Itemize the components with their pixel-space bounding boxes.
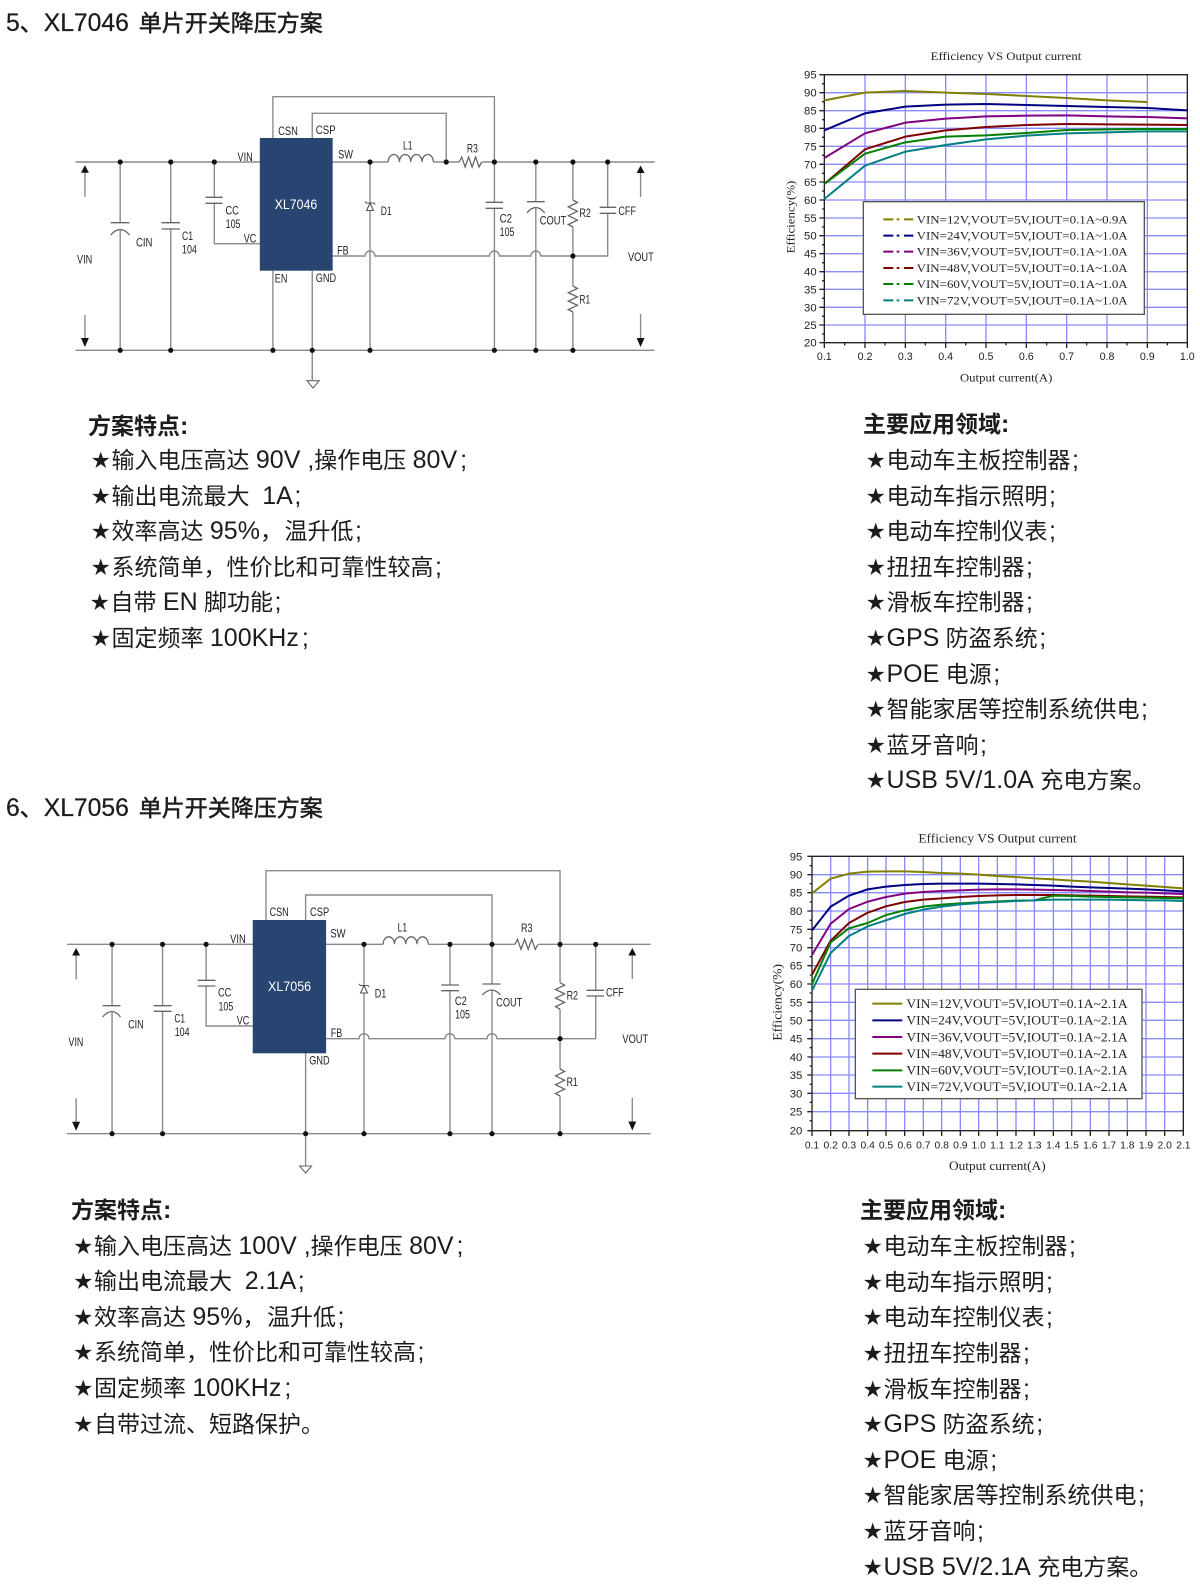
- y tick labels: 60: [790, 979, 802, 991]
- component labels: C1: [174, 1011, 185, 1026]
- component labels: VOUT: [628, 250, 654, 264]
- feature list: 效率高达 95%，温升低;: [94, 1303, 344, 1331]
- application list: ★: [866, 592, 885, 613]
- legend: VIN=48V,VOUT=5V,IOUT=0.1A~2.1A: [906, 1047, 1129, 1061]
- junction dots: [118, 159, 610, 353]
- application list: ★: [864, 1379, 882, 1400]
- application list: ★: [866, 699, 885, 720]
- text block: XL7056 features: [71, 1196, 464, 1436]
- component labels: [69, 905, 649, 1089]
- y tick labels: 50: [790, 1015, 802, 1027]
- y tick labels: 45: [790, 1034, 802, 1046]
- x tick labels: 0.2: [823, 1141, 838, 1152]
- component labels: FB: [337, 243, 349, 258]
- grid: [812, 856, 1183, 1131]
- text block: XL7046 features: [88, 412, 467, 652]
- component labels: VIN: [69, 1035, 83, 1049]
- axes and ticks: [819, 75, 1187, 348]
- component labels: L1: [398, 920, 407, 935]
- heading: applications: 主要应用领域:: [863, 410, 1009, 438]
- application list: 扭扭车控制器;: [886, 553, 1033, 581]
- application list: POE 电源;: [884, 1446, 997, 1474]
- x tick labels: [805, 1141, 1191, 1152]
- component labels: R2: [567, 988, 578, 1003]
- x tick labels: 0.2: [858, 351, 872, 363]
- x tick labels: 1.1: [990, 1141, 1005, 1152]
- component labels: VIN: [77, 252, 92, 267]
- application list: GPS 防盗系统;: [884, 1410, 1043, 1438]
- application list: ★: [866, 628, 885, 649]
- feature list: ★: [74, 1271, 93, 1292]
- component labels: VIN: [238, 150, 253, 164]
- application list: ★: [864, 1343, 882, 1364]
- feature list: ★: [74, 1378, 93, 1399]
- application list: USB 5V/2.1A 充电方案。: [884, 1553, 1152, 1581]
- junction dots: [109, 942, 598, 1136]
- feature list: ★: [74, 1307, 93, 1328]
- line chart: XL7046 efficiency vs output current: [783, 49, 1195, 384]
- x axis title: Output current(A): [949, 1159, 1046, 1173]
- y tick labels: 70: [790, 943, 802, 955]
- y tick labels: [790, 851, 802, 1137]
- feature list: 输入电压高达 100V ,操作电压 80V;: [94, 1232, 464, 1260]
- component labels: D1: [375, 986, 386, 1001]
- legend: VIN=24V,VOUT=5V,IOUT=0.1A~1.0A: [917, 229, 1128, 243]
- x tick labels: 0.7: [1059, 351, 1074, 363]
- wires: [67, 871, 651, 1166]
- x tick labels: [817, 351, 1195, 363]
- x tick labels: 0.5: [879, 1141, 893, 1152]
- x tick labels: 1.0: [1180, 351, 1195, 363]
- legend: VIN=72V,VOUT=5V,IOUT=0.1A~1.0A: [917, 293, 1128, 307]
- diode D1: [365, 202, 375, 210]
- application list: 扭扭车控制器;: [884, 1339, 1030, 1367]
- x tick labels: 0.1: [805, 1141, 819, 1152]
- chart title: Efficiency VS Output current: [931, 49, 1082, 63]
- y tick labels: 95: [790, 851, 802, 863]
- component labels: CSN: [270, 905, 289, 919]
- voltage arrows: [76, 955, 632, 1122]
- component labels: CIN: [136, 235, 152, 250]
- component labels: R2: [579, 206, 591, 220]
- x tick labels: 0.4: [938, 351, 953, 363]
- y tick labels: 30: [804, 302, 817, 314]
- feature list: [74, 1232, 464, 1436]
- application list: ★: [866, 557, 885, 578]
- application list: [864, 1232, 1152, 1581]
- feature list: [90, 446, 467, 652]
- capacitors: [103, 980, 604, 1017]
- y tick labels: 35: [790, 1070, 802, 1082]
- application list: ★: [864, 1414, 882, 1435]
- application list: 电动车控制仪表;: [884, 1303, 1053, 1331]
- x tick labels: 1.0: [971, 1141, 986, 1152]
- feature list: 固定频率 100KHz;: [112, 624, 309, 652]
- component labels: C1: [182, 229, 193, 243]
- component labels: CC: [225, 203, 239, 218]
- x tick labels: 1.8: [1120, 1141, 1135, 1152]
- application list: 滑板车控制器;: [884, 1375, 1030, 1403]
- application list: 智能家居等控制系统供电;: [884, 1481, 1145, 1509]
- application list: 蓝牙音响;: [884, 1517, 984, 1545]
- x tick labels: 0.3: [842, 1141, 856, 1152]
- x tick labels: 2.0: [1157, 1141, 1172, 1152]
- component labels: CFF: [606, 985, 624, 1000]
- legend: VIN=12V,VOUT=5V,IOUT=0.1A~2.1A: [906, 997, 1129, 1011]
- component labels: R1: [579, 292, 590, 307]
- component labels: SW: [338, 147, 354, 162]
- y tick labels: 90: [804, 88, 817, 100]
- component labels: GND: [309, 1053, 330, 1068]
- y tick labels: 85: [790, 888, 802, 900]
- x tick labels: 1.7: [1102, 1141, 1116, 1152]
- feature list: 输出电流最大 2.1A;: [94, 1267, 305, 1295]
- component labels: C2: [500, 211, 512, 226]
- text block: XL7056 applications: [860, 1196, 1152, 1581]
- component labels: COUT: [540, 213, 567, 228]
- feature list: 自带过流、短路保护。: [94, 1410, 324, 1436]
- y tick labels: 70: [804, 159, 817, 171]
- heading: features: 方案特点:: [88, 412, 188, 440]
- application list: ★: [864, 1485, 882, 1506]
- application list: 电动车指示照明;: [884, 1268, 1053, 1296]
- component labels: EN: [275, 271, 287, 286]
- x tick labels: 0.5: [979, 351, 993, 363]
- feature list: ★: [92, 521, 110, 542]
- component labels: CIN: [128, 1017, 144, 1032]
- x tick labels: 0.3: [898, 351, 913, 363]
- component labels: CSP: [310, 905, 329, 919]
- x tick labels: 0.6: [897, 1141, 912, 1152]
- circuit diagram: XL7056: [67, 871, 651, 1173]
- feature list: ★: [74, 1414, 93, 1434]
- y tick labels: 50: [804, 231, 817, 243]
- feature list: ★: [92, 628, 110, 649]
- legend: VIN=60V,VOUT=5V,IOUT=0.1A~2.1A: [906, 1064, 1129, 1078]
- component labels: CC: [218, 985, 232, 1000]
- application list: ★: [866, 735, 885, 756]
- legend: VIN=36V,VOUT=5V,IOUT=0.1A~1.0A: [917, 245, 1128, 259]
- component labels: 105: [218, 999, 234, 1014]
- feature list: 输入电压高达 90V ,操作电压 80V;: [112, 446, 467, 474]
- feature list: 输出电流最大 1A;: [112, 482, 301, 510]
- application list: ★: [864, 1272, 882, 1293]
- legend: [863, 202, 1144, 314]
- legend: VIN=48V,VOUT=5V,IOUT=0.1A~1.0A: [917, 261, 1128, 275]
- y tick labels: 75: [790, 924, 802, 936]
- feature list: 系统简单，性价比和可靠性较高;: [94, 1338, 424, 1366]
- x axis title: Output current(A): [960, 370, 1052, 384]
- component labels: R1: [567, 1075, 578, 1089]
- chip: XL7046: XL7046: [275, 196, 318, 212]
- component labels: D1: [381, 204, 392, 218]
- feature list: ★: [74, 1342, 93, 1363]
- component labels: R3: [521, 921, 533, 935]
- component labels: VC: [244, 231, 257, 246]
- inductor L1 and resistors: [388, 154, 577, 312]
- component labels: CSP: [316, 123, 336, 137]
- application list: ★: [866, 486, 885, 507]
- x tick labels: 1.2: [1009, 1141, 1023, 1152]
- component labels: 104: [175, 1025, 190, 1039]
- y tick labels: [804, 70, 817, 350]
- x tick labels: 0.9: [1140, 351, 1155, 363]
- y tick labels: 25: [804, 320, 817, 332]
- x tick labels: 1.3: [1027, 1141, 1042, 1152]
- component labels: FB: [331, 1026, 342, 1040]
- y tick labels: 55: [804, 213, 817, 225]
- y tick labels: 55: [790, 997, 802, 1009]
- y tick labels: 20: [804, 338, 817, 350]
- component labels: COUT: [496, 995, 523, 1010]
- y tick labels: 85: [804, 106, 817, 118]
- x tick labels: 0.1: [817, 351, 832, 363]
- chip: XL7046: [260, 138, 333, 271]
- heading: features: 方案特点:: [71, 1196, 171, 1224]
- legend: VIN=60V,VOUT=5V,IOUT=0.1A~1.0A: [917, 277, 1128, 291]
- component labels: CSN: [278, 124, 298, 138]
- application list: 电动车主板控制器;: [884, 1232, 1076, 1260]
- y tick labels: 75: [804, 141, 817, 153]
- application list: 蓝牙音响;: [886, 731, 987, 759]
- component labels: 104: [182, 242, 197, 257]
- circuit diagram: XL7046: [75, 97, 655, 388]
- y tick labels: 80: [790, 906, 802, 918]
- application list: ★: [864, 1557, 882, 1578]
- chip: XL7056: XL7056: [268, 978, 311, 994]
- feature list: 系统简单，性价比和可靠性较高;: [112, 553, 442, 581]
- line chart: XL7056 efficiency vs output current: [771, 831, 1191, 1173]
- y tick labels: 35: [804, 284, 817, 296]
- capacitors: [111, 197, 616, 235]
- y tick labels: 40: [790, 1052, 802, 1064]
- y axis title: Efficiency(%): [771, 964, 785, 1041]
- component labels: 105: [226, 217, 241, 231]
- application list: ★: [864, 1307, 882, 1328]
- legend: VIN=24V,VOUT=5V,IOUT=0.1A~2.1A: [906, 1014, 1129, 1028]
- legend: VIN=36V,VOUT=5V,IOUT=0.1A~2.1A: [906, 1030, 1129, 1044]
- component labels: VC: [237, 1013, 250, 1028]
- title: section 6: 6、XL7056 单片开关降压方案: [6, 794, 323, 822]
- data curves: [812, 871, 1183, 991]
- feature list: 固定频率 100KHz;: [94, 1374, 291, 1402]
- feature list: ★: [92, 486, 110, 507]
- x tick labels: 0.8: [934, 1141, 949, 1152]
- legend: VIN=72V,VOUT=5V,IOUT=0.1A~2.1A: [906, 1080, 1129, 1094]
- y tick labels: 65: [790, 961, 802, 973]
- y tick labels: 45: [804, 249, 817, 261]
- chart title: Efficiency VS Output current: [918, 831, 1077, 845]
- x tick labels: 0.4: [860, 1141, 875, 1152]
- inductor L1 and resistors: [383, 937, 565, 1096]
- heading: applications: 主要应用领域:: [860, 1196, 1006, 1224]
- application list: ★: [866, 770, 885, 791]
- y tick labels: 25: [790, 1107, 802, 1119]
- y tick labels: 90: [790, 870, 802, 882]
- feature list: 效率高达 95%，温升低;: [112, 517, 362, 545]
- application list: ★: [866, 450, 885, 471]
- application list: ★: [864, 1521, 882, 1542]
- application list: 电动车控制仪表;: [886, 517, 1056, 545]
- diode D1: [359, 984, 369, 993]
- y tick labels: 95: [804, 70, 817, 82]
- y tick labels: 65: [804, 177, 817, 189]
- component labels: GND: [316, 271, 336, 285]
- component labels: VOUT: [622, 1032, 649, 1046]
- application list: ★: [866, 664, 885, 685]
- x tick labels: 0.7: [916, 1141, 931, 1152]
- component labels: 105: [455, 1007, 470, 1022]
- application list: USB 5V/1.0A 充电方案。: [886, 766, 1155, 794]
- chip: XL7056: [253, 920, 326, 1053]
- x tick labels: 0.8: [1100, 351, 1114, 363]
- component labels: CFF: [618, 204, 636, 218]
- x tick labels: 1.5: [1064, 1141, 1079, 1152]
- application list: 智能家居等控制系统供电;: [886, 695, 1148, 723]
- grid: [824, 75, 1187, 343]
- ground symbol: [307, 381, 319, 388]
- feature list: ★: [92, 557, 110, 578]
- text block: XL7046 applications: [863, 410, 1155, 794]
- x tick labels: 2.1: [1176, 1141, 1191, 1152]
- axes and ticks: [807, 856, 1183, 1136]
- application list: ★: [866, 521, 885, 542]
- application list: 电动车主板控制器;: [886, 446, 1079, 474]
- application list: GPS 防盗系统;: [886, 624, 1046, 652]
- feature list: ★: [92, 450, 110, 471]
- application list: [866, 446, 1155, 794]
- y tick labels: 30: [790, 1088, 802, 1100]
- feature list: 自带 EN 脚功能;: [110, 588, 281, 616]
- application list: POE 电源;: [886, 660, 1000, 688]
- legend: [855, 989, 1142, 1099]
- x tick labels: 0.6: [1019, 351, 1034, 363]
- y tick labels: 60: [804, 195, 817, 207]
- feature list: ★: [90, 592, 109, 613]
- y tick labels: 40: [804, 267, 817, 279]
- feature list: ★: [74, 1236, 93, 1256]
- application list: 电动车指示照明;: [886, 482, 1056, 510]
- y tick labels: 20: [790, 1125, 802, 1137]
- component labels: [77, 123, 654, 307]
- y axis title: Efficiency(%): [783, 181, 797, 253]
- component labels: C2: [455, 994, 467, 1008]
- title: section 5: 5、XL7046 单片开关降压方案: [6, 10, 323, 36]
- application list: 滑板车控制器;: [886, 588, 1033, 616]
- x tick labels: 1.4: [1046, 1141, 1061, 1152]
- x tick labels: 1.9: [1139, 1141, 1153, 1152]
- application list: ★: [864, 1450, 882, 1471]
- data curves: [824, 91, 1187, 199]
- component labels: SW: [330, 926, 346, 941]
- x tick labels: 1.6: [1083, 1141, 1098, 1152]
- x tick labels: 0.9: [953, 1141, 968, 1152]
- y tick labels: 80: [804, 123, 817, 135]
- voltage arrows: [85, 172, 641, 338]
- ground symbol: [300, 1166, 312, 1173]
- component labels: VIN: [230, 932, 246, 946]
- wires: [75, 97, 655, 380]
- component labels: R3: [467, 141, 478, 156]
- component labels: 105: [500, 225, 515, 239]
- legend: VIN=12V,VOUT=5V,IOUT=0.1A~0.9A: [917, 212, 1128, 226]
- application list: ★: [864, 1236, 882, 1257]
- component labels: L1: [403, 138, 413, 153]
